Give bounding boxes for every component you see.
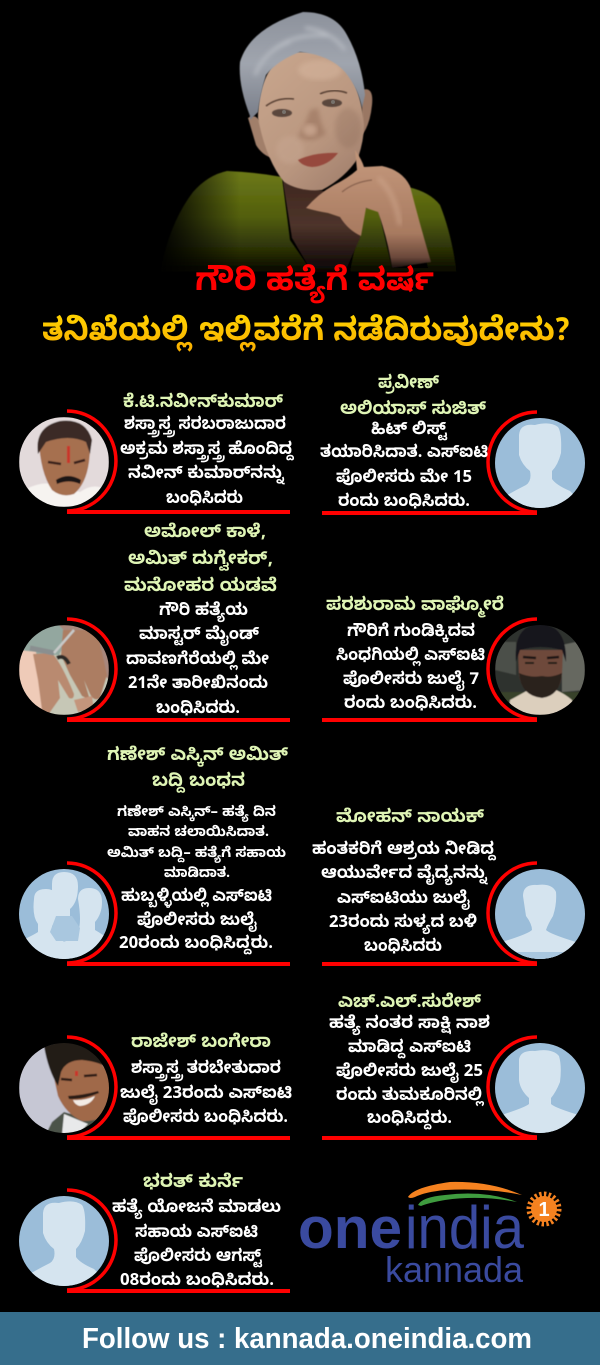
hand and arm — [306, 150, 431, 268]
lips — [298, 153, 338, 167]
icon: placeholder avatar — [494, 1043, 586, 1134]
names: ಮನೋಹರ ಯಡವೆ — [124, 576, 277, 601]
portrait photo — [155, 12, 457, 280]
icon: green swoosh — [418, 1194, 517, 1206]
description: ರಂದು ತುಮಕೂರಿನಲ್ಲಿ — [336, 1086, 485, 1110]
small description: ವಾಹನ ಚಲಾಯಿಸಿದಾತ. — [128, 824, 269, 844]
icon: placeholder avatar — [495, 869, 585, 960]
photo: bearded man — [495, 624, 585, 715]
description: ಹುಬ್ಬಳ್ಳಿಯಲ್ಲಿ ಎಸ್‌ಐಟಿ — [121, 887, 272, 911]
description — [119, 887, 273, 958]
panel: Ganesh Miskin, Amit Baddi — [18, 745, 290, 966]
description: ಪೊಲೀಸರು ಜುಲೈ — [137, 911, 257, 935]
red arc and rule — [67, 411, 290, 514]
description: ಸಿಂಧಗಿಯಲ್ಲಿ ಎಸ್‌ಐಟಿ — [336, 646, 485, 670]
names: ಅಮಿತ್ ದುಗ್ವೇಕರ್, — [128, 549, 273, 574]
description: 21ನೇ ತಾರೀಖಿನಂದು — [128, 674, 268, 698]
name: ಕೆ.ಟಿ.ನವೀನ್‌ಕುಮಾರ್ — [123, 392, 284, 417]
panel: K.T. Naveen Kumar — [19, 392, 295, 514]
red arc and rule — [322, 619, 537, 722]
small description: ಅಮಿತ್ ಬದ್ದಿ– ಹತ್ಯೆಗೆ ಸಹಾಯ — [107, 845, 286, 865]
name: ಎಚ್.ಎಲ್.ಸುರೇಶ್ — [338, 992, 482, 1017]
description: ಅಕ್ರಮ ಶಸ್ತ್ರಾಸ್ತ್ರ ಹೊಂದಿದ್ದ — [120, 440, 295, 464]
kannada wordmark: kannada — [385, 1249, 524, 1290]
description: ಪೊಲೀಸರು ಆಗಸ್ಟ್ — [134, 1247, 263, 1271]
footer text: Follow us : kannada.oneindia.com — [82, 1323, 532, 1355]
description: ಶಸ್ತ್ರಾಸ್ತ್ರ ತರಬೇತುದಾರ — [131, 1059, 281, 1083]
small description: ಮಾಡಿದಾತ. — [164, 865, 230, 885]
description — [320, 420, 488, 516]
red arc and rule — [67, 619, 290, 722]
description — [120, 415, 295, 513]
panel: Mohan Nayak — [312, 807, 585, 966]
red arc and rule — [322, 863, 537, 966]
name: ಅಲಿಯಾಸ್ ಸುಜಿತ್ — [340, 399, 487, 424]
title — [42, 264, 570, 358]
description: ದಾವಣಗೆರೆಯಲ್ಲಿ ಮೇ — [126, 650, 269, 674]
name: ಪ್ರವೀಣ್ — [378, 373, 440, 398]
one wordmark: one — [298, 1196, 402, 1261]
description: ನವೀನ್ ಕುಮಾರ್‌ನನ್ನು — [128, 464, 285, 488]
names — [107, 745, 289, 796]
nose — [298, 108, 326, 140]
ears — [248, 116, 272, 158]
description: ಹತ್ಯೆ ನಂತರ ಸಾಕ್ಷಿ ನಾಶ — [329, 1014, 490, 1038]
names: ಗಣೇಶ್ ಎಸ್ಕಿನ್ ಅಮಿತ್ — [107, 745, 289, 770]
face — [258, 52, 364, 190]
description — [120, 1059, 292, 1132]
eyes — [272, 109, 292, 117]
description: ರಂದು ಬಂಧಿಸಿದರು. — [338, 492, 470, 516]
photo: man with moustache — [19, 417, 109, 507]
red arc and rule — [322, 1037, 537, 1140]
description: 08ರಂದು ಬಂಧಿಸಿದರು. — [120, 1271, 274, 1295]
description: ಮಾಡಿದ್ದ ಎಸ್‌ಐಟಿ — [348, 1038, 471, 1062]
name: ಭರತ್ ಕುರ್ನೆ — [143, 1172, 243, 1197]
description: ಪೊಲೀಸರು ಮೇ 15 — [336, 468, 472, 492]
description: ಎಸ್‌ಐಟಿಯು ಜುಲೈ — [337, 889, 470, 913]
icon: placeholder avatar — [495, 418, 585, 509]
panel: Rajesh Bangera — [19, 1032, 292, 1140]
description: ರಂದು ಬಂಧಿಸಿದರು. — [344, 694, 477, 718]
description: ಬಂಧಿಸಿದರು. — [156, 699, 240, 723]
description — [336, 622, 485, 718]
description: ಹತ್ಯೆ ಯೋಜನೆ ಮಾಡಲು — [112, 1198, 281, 1222]
description: ಹಿಟ್ ಲಿಸ್ಟ್ — [371, 420, 448, 444]
description — [312, 840, 497, 961]
description: ಬಂಧಿಸಿದ್ದರು. — [367, 1109, 452, 1133]
brows — [266, 99, 294, 106]
description — [112, 1198, 281, 1295]
description — [329, 1014, 490, 1133]
small description: ಗಣೇಶ್ ಎಸ್ಕಿನ್– ಹತ್ಯೆ ದಿನ — [117, 804, 276, 824]
red arc and rule — [67, 1037, 290, 1140]
chest — [283, 182, 362, 272]
description: 20ರಂದು ಬಂಧಿಸಿದ್ದರು. — [119, 934, 273, 958]
description: ಗೌರಿ ಹತ್ಯೆಯ — [159, 601, 248, 625]
icon: placeholder avatar — [19, 1196, 109, 1287]
panel: H.L. Suresh — [322, 992, 586, 1140]
description: ಬಂಧಿಸಿದರು — [166, 489, 243, 513]
names: ಅಮೋಲ್ ಕಾಳೆ, — [144, 522, 266, 547]
description: ಆಯುರ್ವೇದ ವೈದ್ಯನನ್ನು — [321, 864, 488, 888]
name: ಮೋಹನ್ ನಾಯಕ್ — [336, 807, 485, 832]
description: ಮಾಸ್ಟರ್ ಮೈಂಡ್ — [139, 625, 260, 649]
description: ಜುಲೈ 23ರಂದು ಎಸ್‌ಐಟಿ — [120, 1084, 292, 1108]
photo: smiling man — [19, 1041, 110, 1134]
names: ಬದ್ದಿ ಬಂಧನ — [152, 771, 245, 796]
description: ಪೊಲೀಸರು ಜುಲೈ 7 — [343, 670, 479, 694]
dress — [160, 171, 457, 275]
description: ಸಹಾಯ ಎಸ್‌ಐಟಿ — [135, 1223, 258, 1247]
names — [124, 522, 277, 601]
panel: Praveen alias Sujith — [320, 373, 585, 516]
name: ಪರಶುರಾಮ ವಾಘ್ಮೋರೆ — [326, 595, 504, 620]
red arc and rule — [322, 412, 537, 515]
panel: Parashuram Waghmore — [322, 595, 585, 722]
red arc and rule — [67, 1190, 290, 1293]
description: ಗೌರಿಗೆ ಗುಂಡಿಕ್ಕಿದವ — [347, 622, 475, 646]
name: ರಾಜೇಶ್ ಬಂಗೇರಾ — [131, 1032, 271, 1057]
panel: Amol Kale, Amit Degwekar, Manohar Yadave — [19, 522, 290, 723]
description: ಹಂತಕರಿಗೆ ಆಶ್ರಯ ನೀಡಿದ್ದ — [312, 840, 497, 864]
hair — [240, 12, 365, 120]
india wordmark: india — [405, 1194, 525, 1261]
description: 23ರಂದು ಸುಳ್ಯದ ಬಳಿ — [329, 913, 477, 937]
icon: group avatar — [18, 869, 110, 960]
footer bar — [0, 1312, 600, 1365]
panel: Bharat Kurne — [19, 1172, 290, 1295]
title line 2: ತನಿಖೆಯಲ್ಲಿ ಇಲ್ಲಿವರೆಗೆ ನಡೆದಿರುವುದೇನು? — [42, 314, 570, 358]
description: ಬಂಧಿಸಿದರು — [364, 937, 442, 961]
description — [126, 601, 269, 723]
red arc and rule — [67, 863, 290, 966]
icon: orange swoosh — [408, 1182, 522, 1198]
photo: handcuffed hands — [19, 625, 109, 715]
description: ಶಸ್ತ್ರಾಸ್ತ್ರ ಸರಬರಾಜುದಾರ — [124, 415, 286, 439]
small description — [107, 804, 286, 885]
title line 1: ಗೌರಿ ಹತ್ಯೆಗೆ ವರ್ಷ — [195, 264, 434, 308]
icon: number one badge — [529, 1194, 559, 1224]
description: ಪೊಲೀಸರು ಬಂಧಿಸಿದರು. — [123, 1108, 288, 1132]
name — [340, 373, 487, 424]
icon: number one badge: 1 — [538, 1199, 550, 1221]
logo: oneindia kannada — [298, 1182, 559, 1290]
description: ತಯಾರಿಸಿದಾತ. ಎಸ್‌ಐಟಿ — [320, 443, 488, 467]
description: ಪೊಲೀಸರು ಜುಲೈ 25 — [336, 1062, 483, 1086]
